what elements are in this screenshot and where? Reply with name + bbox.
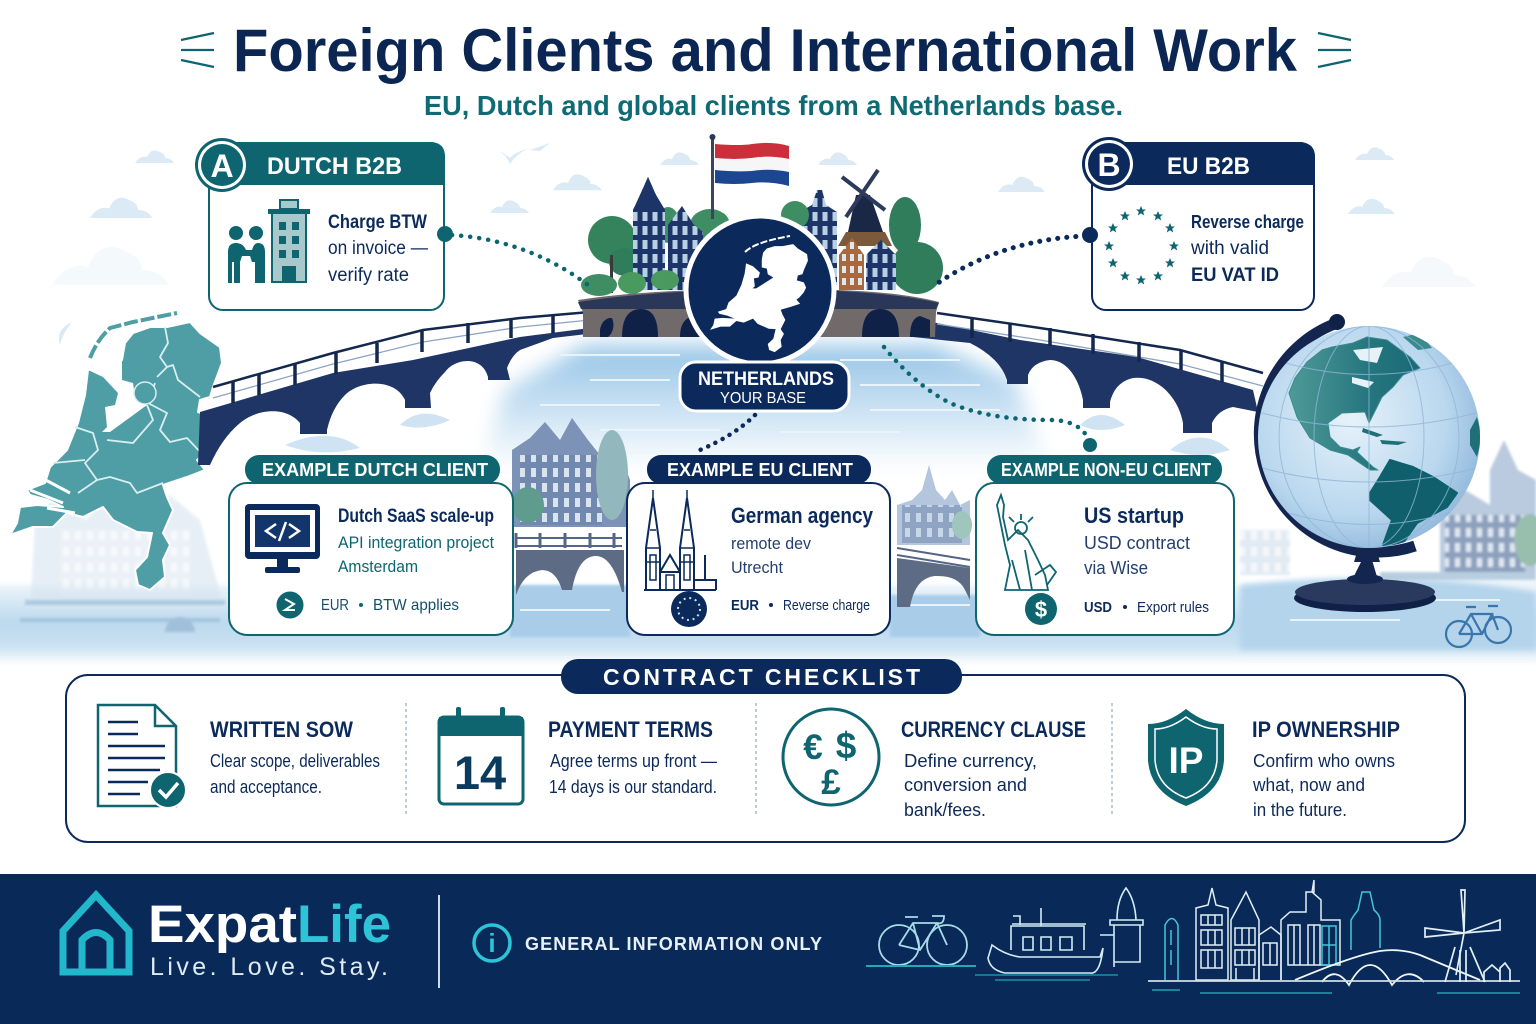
icon: code monitor	[245, 504, 320, 573]
icon: bicycle in water scene	[1446, 606, 1511, 647]
text: Reverse charge: EU VAT ID	[1191, 265, 1279, 286]
text: EUR reverse charge: EUR	[731, 597, 759, 614]
pill: example Dutch client: EXAMPLE DUTCH CLIENT	[262, 459, 489, 480]
footer illustration: bicycle	[866, 916, 976, 966]
item: IP ownership: Confirm who owns	[1253, 751, 1395, 771]
map: Netherlands provinces	[10, 313, 222, 590]
faded city: left	[20, 475, 225, 632]
icon: calendar 14	[439, 707, 523, 804]
icon: IP shield	[1148, 709, 1224, 806]
text: US startup: US startup	[1084, 503, 1184, 528]
globe connector dot	[1083, 438, 1097, 452]
faded city: right	[1240, 440, 1536, 580]
icon: currency symbols: €	[803, 728, 823, 767]
item: currency clause: conversion and	[904, 775, 1027, 795]
item: currency clause	[901, 717, 1086, 820]
text: EUR reverse charge	[731, 597, 870, 614]
emblem: Netherlands circle	[686, 216, 834, 364]
panel: example EU client	[627, 455, 890, 635]
label: Netherlands your base	[680, 362, 849, 411]
logo: ExpatLife wordmark	[148, 895, 391, 981]
icon: document with check	[98, 705, 186, 808]
text: EUR BTW applies: EUR	[321, 597, 349, 614]
icon: info	[474, 925, 510, 961]
item: IP ownership	[1252, 717, 1400, 820]
logo: ExpatLife wordmark: Live. Love. Stay.	[150, 953, 388, 981]
text: Reverse charge: Reverse charge	[1191, 211, 1304, 232]
text: EUR reverse charge: Reverse charge	[783, 597, 870, 614]
pill: example EU client	[647, 455, 871, 484]
title decoration left	[181, 33, 214, 67]
item: written SOW	[210, 717, 380, 797]
item: payment terms: Agree terms up front —	[550, 751, 717, 771]
panel: example Dutch client	[229, 455, 513, 635]
item: currency clause: bank/fees.	[904, 800, 986, 820]
illustration: stone arched bridge under base	[578, 290, 939, 337]
footer band	[0, 874, 1536, 1024]
footer illustration: canal boat and tower	[975, 888, 1143, 980]
icon: dollar badge	[1025, 593, 1057, 625]
badge B: B	[1097, 147, 1121, 183]
item: payment terms: 14 days is our standard.	[549, 777, 717, 797]
item: IP ownership: IP OWNERSHIP	[1252, 717, 1400, 742]
item: written SOW: WRITTEN SOW	[210, 717, 353, 742]
icon: dollar badge: $	[1035, 597, 1047, 622]
text: USD export rules	[1084, 599, 1209, 616]
heading: EU B2B: EU B2B	[1167, 153, 1250, 180]
icon: currency symbols	[783, 709, 879, 805]
text: US startup: USD contract	[1084, 533, 1190, 553]
item: currency clause: CURRENCY CLAUSE	[901, 717, 1086, 742]
icon: people and building	[228, 200, 310, 283]
text: Reverse charge: with valid	[1190, 238, 1269, 259]
heading: contract checklist: CONTRACT CHECKLIST	[603, 664, 923, 690]
panel: Dutch B2B	[195, 138, 453, 310]
item: payment terms: PAYMENT TERMS	[548, 717, 713, 742]
heading: Dutch B2B: DUTCH B2B	[267, 153, 402, 180]
text: German agency	[731, 503, 874, 577]
text: EUR BTW applies: BTW applies	[373, 597, 459, 614]
text: German agency: remote dev	[731, 534, 811, 553]
text: USD export rules: Export rules	[1137, 599, 1209, 616]
badge A	[195, 138, 249, 192]
text: Charge BTW	[328, 212, 428, 286]
item: written SOW: Clear scope, deliverables	[210, 751, 380, 771]
icon: currency symbols: £	[821, 763, 841, 802]
logo: ExpatLife wordmark: Expat	[148, 895, 297, 954]
pill: example Dutch client	[245, 455, 500, 484]
logo: house icon	[63, 895, 129, 972]
logo: ExpatLife wordmark: Life	[297, 895, 391, 954]
badge B	[1082, 137, 1136, 191]
item: IP ownership: what, now and	[1252, 775, 1365, 795]
icon: info: i	[488, 928, 496, 958]
text: USD export rules: USD	[1084, 599, 1112, 616]
bridge: right span	[913, 313, 1263, 433]
disclaimer text: GENERAL INFORMATION ONLY	[525, 934, 822, 954]
connector: EU B2B to base	[935, 236, 1085, 285]
text: Reverse charge	[1190, 211, 1304, 286]
text: EUR BTW applies	[321, 597, 459, 614]
title: Foreign Clients and International Work	[233, 17, 1298, 84]
icon: cathedral	[644, 490, 716, 590]
connector: base to non-EU client	[884, 347, 1088, 438]
panel: example non-EU client	[976, 455, 1234, 635]
text: US startup: via Wise	[1084, 558, 1148, 578]
pill: example EU client: EXAMPLE EU CLIENT	[667, 459, 854, 480]
connector: base to EU client	[700, 415, 755, 450]
icon: Statue of Liberty	[997, 495, 1056, 590]
item: currency clause: Define currency,	[904, 751, 1037, 771]
icon: currency symbols: $	[836, 725, 857, 766]
icon: calendar 14: 14	[454, 746, 506, 799]
label: Netherlands your base: NETHERLANDS	[698, 369, 834, 390]
text: German agency: German agency	[731, 503, 874, 528]
connector: Dutch B2B to base	[452, 235, 592, 288]
item: IP ownership: in the future.	[1253, 800, 1347, 820]
title decoration right	[1318, 33, 1351, 67]
text: Dutch SaaS scale-up	[338, 506, 494, 576]
panel: contract checklist	[66, 659, 1465, 842]
flag: Netherlands	[710, 134, 789, 219]
footer illustration: windmill	[1425, 890, 1510, 982]
water	[0, 345, 1536, 665]
city and bridge between Dutch and EU cards	[512, 418, 630, 595]
pill: example non-EU client	[987, 455, 1222, 484]
background clouds	[52, 143, 1476, 345]
text: Charge BTW: on invoice —	[328, 238, 428, 259]
icon: IP shield: IP	[1169, 740, 1203, 781]
bridge: left span	[198, 312, 596, 465]
icon: EUR token	[276, 592, 304, 618]
pill: example non-EU client: EXAMPLE NON-EU CLIENT	[1001, 459, 1212, 480]
item: written SOW: and acceptance.	[210, 777, 322, 797]
item: payment terms	[548, 717, 717, 797]
text: Dutch SaaS scale-up: Amsterdam	[338, 557, 418, 576]
text: Dutch SaaS scale-up: Dutch SaaS scale-up	[338, 506, 494, 527]
text: US startup	[1084, 503, 1190, 578]
panel: EU B2B	[1082, 137, 1315, 310]
badge A: A	[210, 148, 234, 184]
city and bridge between EU and non-EU cards	[897, 465, 972, 607]
footer illustration: canal houses	[1165, 880, 1380, 980]
subtitle: EU, Dutch and global clients from a Netherlands base.	[424, 90, 1123, 121]
text: Charge BTW: Charge BTW	[328, 212, 427, 233]
globe	[1258, 314, 1482, 612]
text: Charge BTW: verify rate	[328, 265, 409, 286]
label: Netherlands your base: YOUR BASE	[720, 390, 806, 407]
icon: EU badge	[671, 591, 707, 627]
illustration: Amsterdam skyline island	[581, 170, 943, 296]
footer illustration: arched bridge	[1148, 950, 1520, 993]
icon: EU stars ring	[1104, 206, 1179, 284]
text: German agency: Utrecht	[731, 558, 783, 577]
heading: contract checklist	[561, 659, 962, 694]
text: Dutch SaaS scale-up: API integration project	[338, 533, 494, 552]
